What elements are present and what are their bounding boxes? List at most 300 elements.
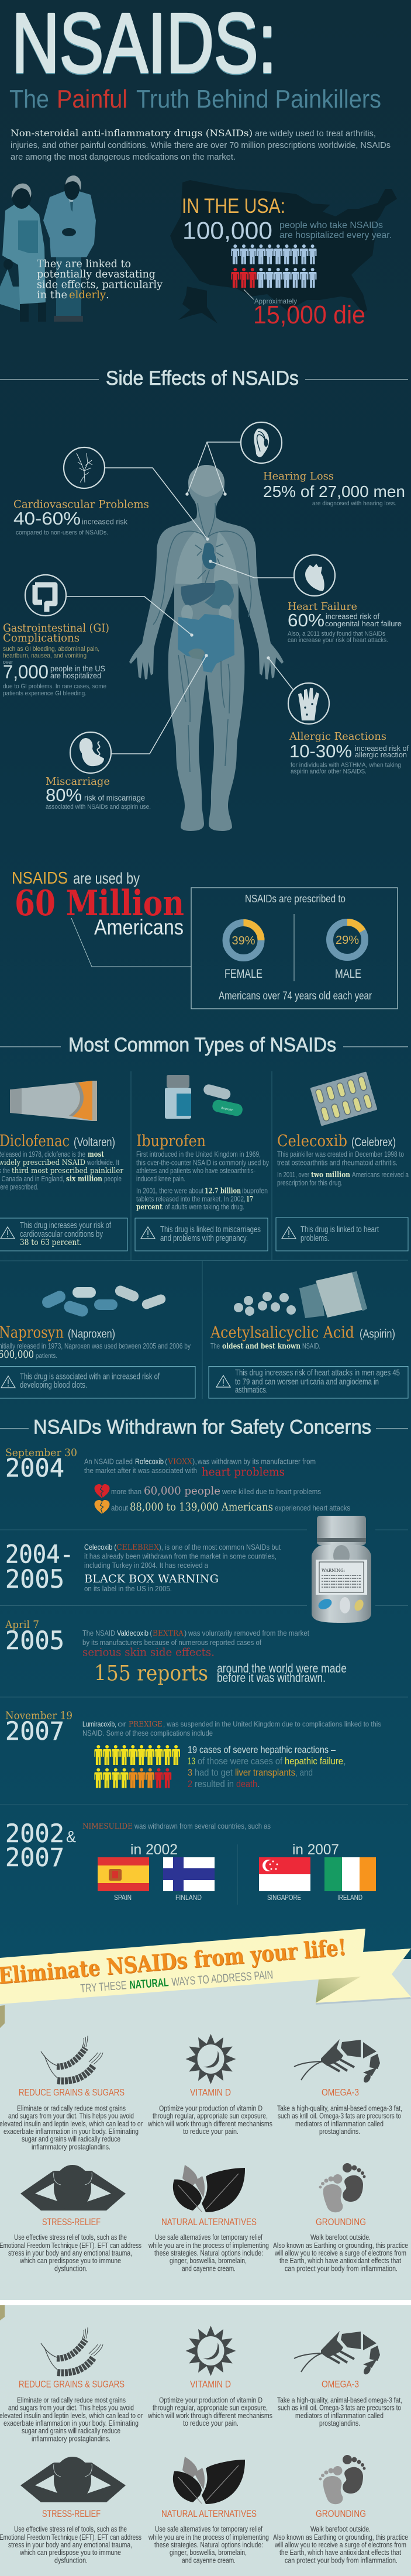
- illustration: elderly couple: [0, 175, 96, 322]
- connector lines and dots: [66, 442, 294, 754]
- warning box: naprosyn: [0, 1366, 195, 1398]
- heading: reduce grains: REDUCE GRAINS & SUGARS: [19, 2379, 125, 2389]
- hepatic case breakdown: 19 cases of severe hepathic reactions –: [188, 1744, 336, 1756]
- text: natural alternatives: and cayenne cream.: [182, 2264, 236, 2272]
- text: natural alternatives: these strategies. Natural options include:: [154, 2249, 263, 2257]
- callout: miscarriage: Miscarriage: [46, 775, 110, 788]
- warning box: celecoxib: This drug is linked to heart: [301, 1225, 379, 1234]
- drug: naprosyn: Naprosyn: [0, 1324, 64, 1342]
- warning box: aspirin: [209, 1366, 408, 1398]
- banner title: Eliminate NSAIDs from your life!: [0, 1934, 347, 1989]
- icon: orange broken heart: [95, 1500, 110, 1514]
- icon: ibuprofen bottle and pills: [165, 1075, 244, 1119]
- hepatic case breakdown: death: [236, 1778, 257, 1789]
- timeline: 2002 and 2007: in 2007: [292, 1842, 339, 1858]
- text: vitamin d: through regular, appropriate sun exposure,: [153, 2403, 268, 2412]
- panel: natural ways: [0, 2034, 408, 2272]
- text: vitamin d: [147, 2104, 272, 2136]
- drug: diclofenac: third most prescribed painkiller: [12, 1167, 124, 1175]
- callout: allergic reactions: aspirin and/or other NSAIDS.: [291, 768, 367, 775]
- heading: omega-3: OMEGA-3: [322, 2379, 359, 2389]
- warning box: ibuprofen: This drug is linked to miscarriages: [160, 1225, 261, 1234]
- usa statistics: are hospitalized every year.: [279, 230, 392, 240]
- elderly text: .: [106, 289, 109, 301]
- text: reduce grains: [0, 2395, 143, 2443]
- ribbon banner: [0, 1929, 411, 2028]
- ribbon end piece: [0, 2305, 5, 2320]
- text: reduce grains: Eliminate or radically reduce most grains: [17, 2395, 126, 2405]
- text: omega-3: [277, 2104, 402, 2136]
- text: natural alternatives: Use safe alternatives for temporary relief: [155, 2525, 263, 2533]
- timeline: 2002 and 2007: NIMESULIDE: [82, 1822, 133, 1831]
- timeline: 2004-2005: on its label in the US in 2005.: [84, 1584, 172, 1593]
- stat: 60,000 people: 60,000 people: [144, 1484, 220, 1497]
- text: natural alternatives: [148, 2233, 269, 2272]
- timeline: 2004: September 30: [5, 1447, 77, 1459]
- text: natural alternatives: ginger, boswellia, bromelain,: [170, 2548, 247, 2557]
- statement: 60 million americans: 60 Million: [15, 883, 184, 924]
- drug: ibuprofen: In 2001, there were about: [136, 1187, 203, 1195]
- icon: naproxen pills: [40, 1284, 167, 1318]
- callout: cardiovascular: 40-60%: [13, 508, 81, 529]
- intro paragraph: Non-steroidal anti-inflammatory drugs (NSAIDs): [11, 128, 253, 139]
- drug: diclofenac: six million: [66, 1175, 102, 1184]
- timeline: 2004: (: [165, 1457, 168, 1465]
- timeline: 2004: 2004: [5, 1454, 64, 1483]
- callout: heart failure: Also, a 2011 study found that NSAIDs: [288, 630, 385, 637]
- heading: most common types: Most Common Types of NSAIDs: [68, 1034, 336, 1056]
- drug: ibuprofen: 12.7 billion: [205, 1187, 241, 1195]
- callout: gastrointestinal: patients experience GI bleeding.: [3, 690, 87, 697]
- heading: natural alternatives: NATURAL ALTERNATIVES: [161, 2216, 257, 2227]
- text: reduce grains: inflammatory prostaglandins.: [32, 2434, 110, 2443]
- timeline: november 2007: NSAID. Some of these complications include: [82, 1729, 213, 1737]
- timeline: 2002 and 2007: was withdrawn from several countries, such as: [134, 1822, 271, 1830]
- warning box: celecoxib: problems.: [301, 1233, 329, 1243]
- callout: heart failure: [288, 601, 402, 644]
- text: omega-3: mediators of inflammation called: [295, 2119, 384, 2128]
- text: reduce grains: elevated insulin and leptin levels, which can lead to or: [0, 2119, 143, 2128]
- pictogram: hepatic cases: [94, 1745, 180, 1788]
- timeline: 2002 and 2007: &: [66, 1827, 76, 1846]
- drug: ibuprofen: of adults were taking the drug.: [165, 1203, 244, 1211]
- icon: intestines: [25, 575, 66, 616]
- text: natural alternatives: while you are in the process of implementing: [148, 2241, 269, 2250]
- timeline: november 2007: or: [118, 1719, 127, 1729]
- panel: prescribed to: MALE: [335, 967, 361, 981]
- timeline: april 2005: ): [184, 1629, 186, 1637]
- timeline: 2004-2005: BLACK BOX WARNING: [84, 1573, 219, 1585]
- statement: 60 million americans: Americans: [94, 915, 184, 939]
- warning box: ibuprofen: [135, 1218, 268, 1251]
- icon: hand: [288, 683, 329, 724]
- timeline: 2004: heart problems: [202, 1464, 285, 1478]
- statement: 60 million americans: [12, 869, 191, 967]
- timeline: april 2005: (: [150, 1629, 153, 1637]
- timeline: november 2007: Lumiracoxib,: [82, 1719, 116, 1729]
- timeline: 2004-2005: 2005: [5, 1565, 64, 1594]
- drug: ibuprofen: 17: [246, 1195, 253, 1203]
- stat: 60,000 people: more than: [111, 1487, 141, 1496]
- icon: leaves: [173, 2457, 245, 2504]
- stat: 88,000 to 139,000: about: [111, 1503, 128, 1512]
- icon: sun: [186, 2034, 236, 2084]
- flag: singapore: [259, 1857, 310, 1902]
- timeline: 2004: the market after it was associated with: [84, 1466, 197, 1475]
- drug: naprosyn: Initially released in 1973, Naproxen was used between 2005 and 2006 by: [0, 1342, 191, 1350]
- callout: allergic reactions: increased risk of: [355, 744, 409, 753]
- drug: ibuprofen: First introduced in the United Kingdom in 1969,: [136, 1150, 261, 1158]
- heading: side effects: Side Effects of NSAIDs: [106, 367, 299, 389]
- text: reduce grains: elevated insulin and leptin levels, which can lead to or: [0, 2411, 143, 2420]
- warning box: naprosyn: This drug is associated with an increased risk of: [20, 1372, 160, 1381]
- elderly text: in the: [37, 289, 67, 301]
- text: stress relief: which can predispose you to immune: [19, 2256, 121, 2265]
- text: reduce grains: and sugars from your diet. This helps you avoid: [8, 2111, 134, 2120]
- elderly text: potentially devastating: [37, 269, 156, 281]
- text: omega-3: [277, 2395, 402, 2427]
- icon: fetus: [70, 732, 111, 773]
- warning box: celecoxib: [276, 1218, 408, 1251]
- hepatic case breakdown: resulted in: [195, 1778, 234, 1789]
- timeline: 2004: ),: [192, 1457, 197, 1465]
- callout: gastrointestinal: people in the US: [50, 664, 105, 673]
- drug: celecoxib: two million: [311, 1171, 350, 1180]
- timeline: april 2005: Valdecoxib: [117, 1629, 148, 1637]
- heading: reduce grains: REDUCE GRAINS & SUGARS: [19, 2087, 125, 2098]
- icon: shrimp: [294, 2331, 380, 2375]
- timeline: april 2005: before it was withdrawn.: [217, 1671, 326, 1685]
- callout: heart failure: can increase your risk of heart attacks.: [288, 637, 388, 644]
- icon: celebrex bottle: [312, 1516, 371, 1623]
- text: stress relief: Use effective stress relief tools, such as the: [14, 2525, 127, 2533]
- warning box: diclofenac: 38 to 63 percent.: [20, 1238, 82, 1247]
- text: natural alternatives: while you are in the process of implementing: [148, 2533, 269, 2541]
- callout: heart failure: 60%: [288, 610, 324, 630]
- pointer line to deaths: [244, 289, 254, 299]
- callout: heart failure: Heart Failure: [288, 601, 357, 613]
- timeline: april 2005: was voluntarily removed from the market: [188, 1629, 309, 1637]
- callout: miscarriage: 80%: [46, 785, 82, 805]
- icon: ibuprofen bottle and pills: Ibuprofen: [221, 1106, 234, 1112]
- timeline: 2002 and 2007: 2002: [5, 1819, 64, 1849]
- icon: stress relief: [20, 2165, 126, 2211]
- callout: miscarriage: [46, 775, 151, 811]
- timeline: november 2007: [5, 1710, 381, 1746]
- stat: 60,000 people: [111, 1484, 321, 1497]
- warning box: naprosyn: developing blood clots.: [20, 1380, 87, 1390]
- text: vitamin d: through regular, appropriate sun exposure,: [153, 2111, 268, 2120]
- light background: natural ways: [0, 1959, 411, 2300]
- text: omega-3: prostaglandins.: [319, 2419, 360, 2427]
- text: vitamin d: Optimize your production of vitamin D: [159, 2395, 263, 2405]
- drug: ibuprofen: tablets released into the market. In 2002,: [136, 1195, 246, 1203]
- callout: hearing loss: 25% of 27,000 men: [263, 482, 405, 501]
- icon: aspirin bottle and tablets: [234, 1271, 367, 1318]
- drug: diclofenac: worldwide. It: [87, 1158, 119, 1167]
- flag: finland: [163, 1857, 215, 1902]
- text: reduce grains: and sugars from your diet. This helps you avoid: [8, 2403, 134, 2412]
- text: stress relief: Use effective stress relief tools, such as the: [14, 2233, 127, 2242]
- text: natural alternatives: Use safe alternatives for temporary relief: [155, 2233, 263, 2242]
- callout: gastrointestinal: heartburn, nausea, and vomiting: [3, 653, 87, 660]
- intro paragraph: are widely used to treat arthritis,: [255, 129, 376, 139]
- timeline: november 2007: , was suspended in the United Kingdom due to complications linked to this: [163, 1719, 381, 1729]
- subtitle: Truth Behind Painkillers: [136, 85, 381, 113]
- timeline: 2004-2005: including Turkey in 2004. It has received a: [84, 1561, 209, 1570]
- drug: aspirin: oldest and best known: [222, 1342, 301, 1351]
- hepatic case breakdown: hepathic failure: [285, 1756, 343, 1767]
- text: omega-3: mediators of inflammation called: [295, 2411, 384, 2420]
- callout: gastrointestinal: are hospitalized: [50, 671, 101, 680]
- timeline: april 2005: BEXTRA: [153, 1629, 184, 1638]
- timeline: april 2005: The NSAID: [82, 1629, 115, 1637]
- text: stress relief: dysfunction.: [54, 2264, 88, 2272]
- usa statistics: people who take NSAIDs: [279, 220, 383, 230]
- drug: celecoxib: [277, 1132, 409, 1187]
- icon: shrimp: [294, 2039, 380, 2084]
- timeline: november 2007: PREXIGE: [129, 1720, 163, 1729]
- timeline: 2004: Rofecoxib: [135, 1457, 164, 1465]
- elderly text: [37, 258, 163, 301]
- icon: feet: [319, 2163, 366, 2212]
- text: stress relief: stress in your body and any emotional trauma,: [8, 2540, 132, 2549]
- icon: blood vessels: [64, 447, 105, 488]
- hepatic case breakdown: [188, 1744, 346, 1789]
- drug: diclofenac: Released in 1978, diclofenac is the: [0, 1150, 85, 1158]
- human body with organs: [129, 465, 284, 831]
- timeline: 2004: was withdrawn by its manufacturer from: [197, 1457, 316, 1465]
- hepatic case breakdown: 3: [188, 1767, 192, 1778]
- text: reduce grains: sugar and grains will radically reduce: [22, 2134, 120, 2143]
- subtitle: Painful: [57, 85, 127, 113]
- timeline: april 2005: [5, 1619, 347, 1685]
- drug: naprosyn: [0, 1324, 191, 1361]
- heading: stress relief: STRESS-RELIEF: [42, 2216, 101, 2227]
- text: vitamin d: which will work through different mechanisms: [147, 2119, 272, 2128]
- text: natural alternatives: ginger, boswellia, bromelain,: [170, 2256, 247, 2265]
- heading: vitamin d: VITAMIN D: [190, 2087, 231, 2098]
- hepatic case breakdown: liver transplants: [235, 1767, 295, 1778]
- drug: diclofenac: Diclofenac: [0, 1132, 70, 1150]
- timeline: april 2005: April 7: [5, 1619, 39, 1631]
- callout: heart failure: increased risk of: [326, 612, 379, 621]
- drug: aspirin: Acetylsalicyclic Acid: [210, 1324, 354, 1342]
- text: vitamin d: Optimize your production of vitamin D: [159, 2104, 263, 2112]
- text: reduce grains: exacerbate inflammation in your body. Eliminating: [4, 2127, 139, 2136]
- callout: allergic reactions: Allergic Reactions: [289, 730, 386, 743]
- drug: diclofenac: (Voltaren): [74, 1136, 115, 1149]
- text: vitamin d: to reduce your pain.: [183, 2127, 239, 2136]
- callout: gastrointestinal: Gastrointestinal (GI): [3, 622, 109, 634]
- intro paragraph: are among the most dangerous medications on the market.: [11, 153, 236, 162]
- donut: male 29%: [330, 922, 365, 957]
- icon: stress relief: [20, 2457, 126, 2502]
- drug: diclofenac: widely prescribed NSAID: [0, 1158, 85, 1167]
- callout: gastrointestinal: due to GI problems. In rare cases, some: [3, 683, 106, 690]
- drug: ibuprofen: this over-the-counter NSAID is commonly used by: [136, 1159, 270, 1167]
- timeline: 2004-2005: ), is one of the most common NSAIDs but: [159, 1543, 281, 1551]
- heading: withdrawn: NSAIDs Withdrawn for Safety Concerns: [33, 1416, 371, 1439]
- drug: naprosyn: (Naproxen): [68, 1327, 115, 1340]
- callout: gastrointestinal: such as GI bleeding, abdominal pain,: [3, 646, 99, 653]
- drug: diclofenac: [0, 1132, 124, 1191]
- flag: finland: FINLAND: [175, 1893, 202, 1902]
- hepatic case breakdown: .: [257, 1778, 260, 1789]
- banner subtitle: [80, 1968, 274, 1995]
- callout: gastrointestinal: [3, 622, 109, 697]
- icon: feet: [319, 2455, 366, 2504]
- hepatic case breakdown: had to get: [195, 1767, 233, 1778]
- text: grounding: [273, 2525, 408, 2565]
- text: omega-3: prostaglandins.: [319, 2127, 360, 2136]
- icon: cream tube: [10, 1081, 97, 1121]
- panel: prescribed to: FEMALE: [225, 967, 263, 981]
- heading: grounding: GROUNDING: [316, 2508, 366, 2519]
- text: reduce grains: sugar and grains will radically reduce: [22, 2426, 120, 2435]
- elderly text: side effects, particularly: [37, 280, 163, 291]
- text: stress relief: [0, 2233, 141, 2272]
- hepatic case breakdown: of those were cases of: [198, 1756, 282, 1767]
- timeline: november 2007: 2007: [5, 1717, 64, 1746]
- white separator strip: [0, 2300, 411, 2305]
- timeline: 2004: An NSAID called: [84, 1457, 133, 1465]
- drug: celecoxib: Celecoxib: [277, 1132, 347, 1150]
- hepatic case breakdown: 13: [188, 1756, 195, 1767]
- callout: allergic reactions: 10-30%: [289, 741, 352, 761]
- intro paragraph: [11, 128, 391, 162]
- callout: miscarriage: risk of miscarriage: [84, 794, 145, 802]
- timeline: april 2005: 2005: [5, 1626, 64, 1656]
- text: natural alternatives: and cayenne cream.: [182, 2556, 236, 2565]
- text: stress relief: dysfunction.: [54, 2556, 88, 2565]
- stat: 88,000 to 139,000: [111, 1501, 350, 1513]
- text: reduce grains: [0, 2104, 143, 2151]
- text: vitamin d: which will work through different mechanisms: [147, 2411, 272, 2420]
- usa statistics: IN THE USA:: [182, 195, 285, 218]
- timeline: april 2005: 155 reports: [94, 1662, 208, 1685]
- timeline: april 2005: by its manufacturers because of numerous reported cases of: [82, 1638, 261, 1647]
- usa statistics: 15,000 die: [253, 301, 365, 329]
- timeline: 2004: VIOXX: [167, 1457, 193, 1467]
- timeline: 2002 and 2007: in 2002: [130, 1842, 178, 1858]
- drug: aspirin: NSAID.: [302, 1342, 320, 1350]
- banner subtitle: WAYS TO ADDRESS PAIN: [171, 1968, 274, 1989]
- dark background: [0, 0, 411, 1960]
- timeline: 2004-2005: Celecoxib (: [84, 1543, 117, 1551]
- callout: cardiovascular: compared to non-users of NSAIDs.: [16, 529, 108, 536]
- callout: cardiovascular: Cardiovascular Problems: [13, 498, 149, 511]
- pictogram: hospitalized people: [231, 244, 317, 288]
- timeline: april 2005: around the world were made: [217, 1662, 347, 1675]
- warning box: diclofenac: cardiovascular conditions by: [20, 1229, 103, 1239]
- text: reduce grains: inflammatory prostaglandins.: [32, 2143, 110, 2151]
- statement: 60 million americans: are used by: [73, 870, 140, 887]
- text: stress relief: [0, 2525, 141, 2565]
- heading: vitamin d: VITAMIN D: [190, 2379, 231, 2389]
- panel: prescribed to: [191, 888, 398, 1009]
- timeline: 2004-2005: CELEBREX: [116, 1543, 160, 1552]
- timeline: november 2007: November 19: [5, 1710, 72, 1722]
- icon: ear: [241, 422, 282, 463]
- stat: 88,000 to 139,000: 88,000 to 139,000 Americans: [130, 1501, 273, 1513]
- callout: hearing loss: [263, 470, 405, 507]
- callout: hearing loss: Hearing Loss: [263, 470, 334, 482]
- hepatic case breakdown: 2: [188, 1778, 192, 1789]
- usa statistics: Approximately: [254, 297, 297, 305]
- elderly text: elderly: [69, 289, 106, 301]
- icon: red broken heart: [95, 1484, 110, 1498]
- drug: naprosyn: patients.: [36, 1353, 57, 1360]
- callout: heart failure: congenital heart failure: [325, 619, 402, 628]
- drug: ibuprofen: athletes and patients who have osteoarthritis-: [136, 1167, 255, 1175]
- timeline: 2004-2005: 2004-: [5, 1540, 74, 1570]
- stat: 60,000 people: were killed due to heart problems: [222, 1487, 321, 1496]
- drug: aspirin: (Aspirin): [360, 1327, 395, 1340]
- flag: ireland: [324, 1857, 376, 1902]
- callout: hearing loss: are diagnosed with hearing loss.: [312, 500, 396, 507]
- heading: natural alternatives: NATURAL ALTERNATIVES: [161, 2508, 257, 2519]
- heading: stress relief: STRESS-RELIEF: [42, 2508, 101, 2519]
- timeline: 2004-2005: [5, 1540, 281, 1594]
- warning box: diclofenac: This drug increases your risk of: [20, 1220, 112, 1230]
- text: vitamin d: to reduce your pain.: [183, 2419, 239, 2427]
- banner subtitle: TRY THESE: [80, 1979, 127, 1995]
- statement: 60 million americans: NSAIDS: [12, 869, 68, 888]
- text: grounding: [273, 2233, 408, 2272]
- text: grounding: Walk barefoot outside.: [310, 2525, 371, 2533]
- banner subtitle: NATURAL: [129, 1976, 169, 1992]
- callout: cardiovascular: increased risk: [82, 517, 127, 526]
- callout: cardiovascular: [13, 498, 149, 536]
- drug: ibuprofen: [136, 1132, 270, 1212]
- drug: ibuprofen: ibuprofen: [242, 1187, 268, 1195]
- drug: celecoxib: prescription for this drug.: [277, 1179, 343, 1187]
- text: reduce grains: exacerbate inflammation in your body. Eliminating: [4, 2419, 139, 2427]
- drug: aspirin: [210, 1324, 395, 1351]
- icon: blister pack: [310, 1071, 378, 1126]
- intro paragraph: injuries, and other painful conditions. While there are over 70 million prescriptions worldwide, NSAIDs: [11, 141, 391, 150]
- panel: prescribed to: Americans over 74 years old each year: [219, 990, 372, 1002]
- subtitle: The: [9, 85, 49, 113]
- flag: spain: SPAIN: [114, 1893, 132, 1902]
- callout: gastrointestinal: 7,000: [3, 661, 49, 682]
- icon: wheat: [41, 2327, 103, 2372]
- callout: allergic reactions: for individuals with ASTHMA, when taking: [291, 761, 401, 768]
- drug: ibuprofen: Ibuprofen: [136, 1132, 206, 1150]
- drug: celecoxib: (Celebrex): [351, 1136, 396, 1149]
- timeline: 2004-2005: it has already been withdrawn from the market in some countries,: [84, 1552, 277, 1560]
- hepatic case breakdown: , and: [295, 1767, 313, 1778]
- icon: wheat: [41, 2036, 103, 2081]
- text: stress relief: Emotional Freedom Technique (EFT). EFT can address: [0, 2533, 141, 2541]
- USA map: [170, 180, 397, 323]
- text: natural alternatives: [148, 2525, 269, 2565]
- callout: miscarriage: associated with NSAIDs and aspirin use.: [46, 804, 151, 811]
- timeline: 2002 and 2007: 2007: [5, 1843, 64, 1872]
- text: reduce grains: Eliminate or radically reduce most grains: [17, 2104, 126, 2112]
- callout: allergic reactions: allergic reaction: [355, 750, 407, 759]
- donut: female 39%: 39%: [232, 934, 255, 947]
- timeline: 2004: [5, 1447, 316, 1483]
- usa statistics: [182, 195, 392, 329]
- callout: gastrointestinal: Complications: [3, 632, 80, 644]
- stat: 88,000 to 139,000: experienced heart attacks: [275, 1503, 350, 1512]
- usa statistics: 100,000: [182, 216, 272, 244]
- drug: diclofenac: most: [88, 1150, 104, 1159]
- drug: ibuprofen: induced knee pain.: [136, 1175, 185, 1183]
- drug: ibuprofen: percent: [136, 1203, 163, 1212]
